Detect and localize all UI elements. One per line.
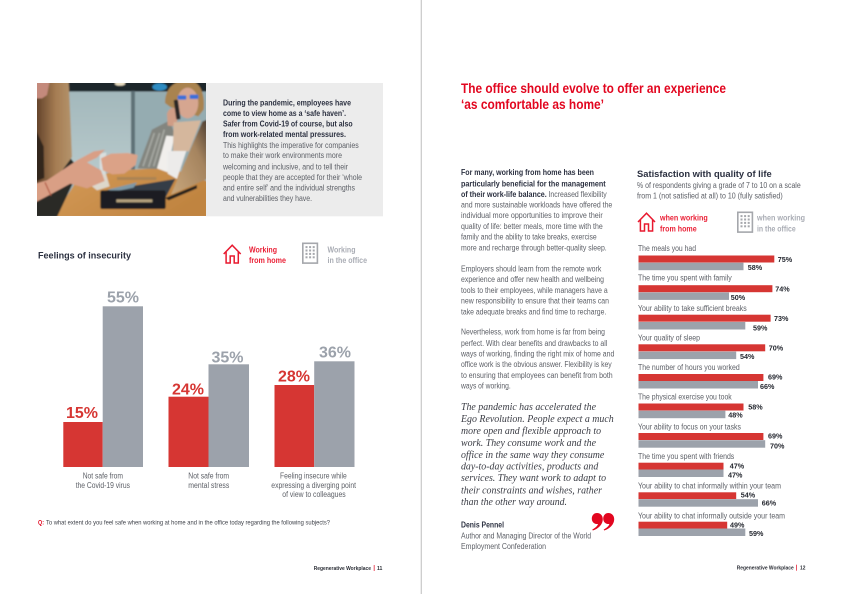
bar group: feeling insecure expressing a view xyxy=(274,344,354,467)
body text: employers: tools to their employees, while managers have a xyxy=(461,286,608,295)
row: family xyxy=(638,273,790,302)
pull quote: Ego Revolution. People expect a much xyxy=(460,413,614,425)
body text: flexibility: office work is the obvious answer. Flexibility is key xyxy=(461,360,612,369)
category label: diverging view: of view to colleagues xyxy=(282,490,346,499)
category label: covid xyxy=(76,472,130,490)
bar group: not safe from the virus xyxy=(63,290,143,467)
pull quote: more open and flexible approach to xyxy=(461,425,601,437)
body text: work-life balance: more and recharge through better-quality sleep. xyxy=(461,243,607,252)
row: chat outside team xyxy=(638,511,785,538)
row: friends: The time you spent with friends xyxy=(638,452,734,461)
legend label: working in the office: Working xyxy=(328,246,356,255)
bar chart: feelings of insecurity xyxy=(63,290,357,499)
photo: woman gesturing at a laptop xyxy=(34,80,210,220)
legend label: when working in the office: in the office xyxy=(757,224,796,234)
body text: flexibility: perfect. With clear benefits and drawbacks to all xyxy=(461,339,607,348)
category label: diverging view: Feeling insecure while xyxy=(280,472,347,480)
row: focus: 70% xyxy=(770,441,785,450)
table xyxy=(54,168,208,217)
row: sleep: 70% xyxy=(769,344,783,353)
body text: flexibility: Nevertheless, work from home is far from being xyxy=(461,328,605,336)
legend label: when working in the office xyxy=(756,214,805,234)
bar group: not safe from the virus: 55% xyxy=(107,290,139,306)
row: focus: Your ability to focus on your tasks xyxy=(638,422,741,431)
row: chat outside team: 49% xyxy=(730,520,745,529)
row: focus xyxy=(638,422,785,450)
category label: mental stress: Not safe from xyxy=(188,472,229,480)
legend: right chart xyxy=(638,212,805,234)
bar group: not safe from the virus: 15% xyxy=(66,405,98,422)
intro bold statement: from work-related mental pressures. xyxy=(223,130,346,139)
quote attribution: Denis Pennel xyxy=(461,520,504,530)
row: meals: 58% xyxy=(748,263,762,272)
pull quote: services. They want work to adapt to xyxy=(461,472,607,484)
intro bold statement: During the pandemic, employees have xyxy=(223,98,351,108)
quote attribution xyxy=(461,520,591,551)
intro bold statement: come to view home as a ‘safe haven’. xyxy=(223,109,346,118)
survey question note: To what extent do you feel safe when working at home and in the office today regarding the following subjects? xyxy=(46,521,331,527)
row: friends xyxy=(638,452,744,479)
pull quote: than the other way around. xyxy=(461,496,567,508)
row: breaks: 59% xyxy=(753,323,768,332)
bar group: not safe from mental stress: 24% xyxy=(172,382,204,398)
legend: left chart xyxy=(224,243,367,265)
right woman xyxy=(138,120,174,169)
panel: intro text xyxy=(206,83,383,216)
row: focus: 69% xyxy=(768,432,783,441)
icon: house xyxy=(224,245,241,263)
body text: flexibility xyxy=(460,328,614,390)
category label: diverging view xyxy=(271,472,357,499)
chart subtitle: from 1 (not satisfied at all) to 10 (fully satisfied) xyxy=(637,191,783,200)
body text: flexibility: to ensuring that employees can benefit from both xyxy=(461,371,613,380)
survey question note: Q: xyxy=(38,521,44,527)
row: family: The time you spent with family xyxy=(638,273,732,282)
bar group: feeling insecure expressing a view: 28% xyxy=(278,369,310,386)
heading: feelings of insecurity: Feelings of insecurity xyxy=(38,250,132,261)
pull quote: day-to-day activities, products and xyxy=(461,460,599,472)
body text: work-life balance: of their work-life balance. xyxy=(461,190,547,199)
row: family: 50% xyxy=(731,293,745,302)
row: physical exercise: 58% xyxy=(748,403,763,412)
body text: work-life balance: For many, working from home has been xyxy=(461,168,594,177)
row: chat outside team: 59% xyxy=(749,529,764,538)
intro body text xyxy=(222,141,362,203)
legend label: when working from home xyxy=(659,214,708,234)
row: breaks: Your ability to take sufficient breaks xyxy=(638,304,747,313)
row: chat within team: 66% xyxy=(762,498,776,507)
row: friends: 47% xyxy=(728,470,743,479)
body text: flexibility: ways of working. xyxy=(460,382,511,390)
footer: page 12: 12 xyxy=(800,566,805,572)
row: meals xyxy=(638,244,792,272)
row: chat within team: 54% xyxy=(741,490,755,499)
row: meals: 75% xyxy=(778,255,792,264)
legend label: working in the office xyxy=(328,246,367,265)
chart subtitle: % of respondents giving a grade of 7 to 10 on a scale xyxy=(637,181,801,190)
laptop xyxy=(100,179,175,198)
legend label: working from home xyxy=(249,246,286,265)
row: sleep xyxy=(638,333,783,361)
icon: closing quotation mark xyxy=(592,513,614,530)
row: sleep: 54% xyxy=(740,352,755,361)
pull quote: The pandemic has accelerated the xyxy=(461,401,596,413)
row: family: 74% xyxy=(775,285,790,294)
body text: work-life balance: particularly beneficial for the management xyxy=(461,179,606,188)
row: chat within team xyxy=(638,482,781,507)
body text: work-life balance xyxy=(461,168,613,252)
intro bold statement xyxy=(223,98,353,139)
row: hours worked xyxy=(638,363,783,391)
legend label: when working from home: when working xyxy=(659,214,708,222)
quote attribution: Author and Managing Director of the World xyxy=(461,532,591,540)
heading: satisfaction with quality of life: Satisfaction with quality of life xyxy=(637,169,772,180)
body text: employers xyxy=(461,264,609,316)
body text: work-life balance: family and the ability to take breaks, exercise xyxy=(461,232,597,241)
body text: employers: experience and offer new health and wellbeing xyxy=(461,275,604,284)
legend label: working in the office: in the office xyxy=(328,256,367,265)
category label: covid: Not safe from xyxy=(83,472,123,480)
title: right page: The office should evolve to offer an experience xyxy=(461,81,726,96)
body text: work-life balance: quality of life: better meals, more time with the xyxy=(461,222,603,231)
body text: employers: new responsibility to ensure that their teams can xyxy=(461,296,609,305)
pull quote: office in the same way they consume xyxy=(461,449,604,461)
quote attribution: Employment Confederation xyxy=(461,542,546,551)
row: chat within team: Your ability to chat informally within your team xyxy=(638,482,781,491)
body text: work-life balance: and more sustainable workloads have offered the xyxy=(461,200,613,209)
row: chat outside team: Your ability to chat informally outside your team xyxy=(638,511,785,520)
icon: house xyxy=(638,213,655,231)
row: sleep: Your quality of sleep xyxy=(638,333,701,342)
row: hours worked: The number of hours you worked xyxy=(638,363,740,372)
row: friends: 47% xyxy=(730,461,744,470)
row: hours worked: 66% xyxy=(760,382,775,391)
pull quote: work. They consume work and the xyxy=(461,437,596,449)
footer: page 11: Regenerative Workplace xyxy=(314,566,371,572)
bar group: not safe from mental stress xyxy=(168,350,249,467)
pull quote: their constraints and wishes, rather xyxy=(461,484,603,496)
bar group: not safe from mental stress: 35% xyxy=(212,350,244,366)
legend label: when working in the office: when working xyxy=(756,214,805,222)
intro body text: welcoming and inclusive, and to tell their xyxy=(222,162,348,172)
chart subtitle xyxy=(637,181,801,200)
row: physical exercise xyxy=(638,392,763,420)
left woman: dark top and hair xyxy=(35,158,74,217)
row: hours worked: 69% xyxy=(768,373,783,382)
body text: work-life balance: individual more opportunities to improve their xyxy=(461,211,603,220)
footer: page 12: Regenerative Workplace xyxy=(737,566,794,572)
body text: employers: take adequate breaks and find time to recharge. xyxy=(461,307,606,316)
bar chart: satisfaction with quality of life xyxy=(638,244,792,538)
title: right page xyxy=(461,81,726,112)
icon: office building xyxy=(303,243,317,263)
pull quote xyxy=(460,401,614,508)
legend label: when working from home: from home xyxy=(660,224,697,234)
title: right page: ‘as comfortable as home’ xyxy=(461,97,604,112)
bar group: feeling insecure expressing a view: 36% xyxy=(319,344,351,362)
row: meals: The meals you had xyxy=(638,244,696,253)
category label: covid: the Covid-19 virus xyxy=(76,481,130,490)
bottle and hands xyxy=(90,152,110,190)
row: breaks xyxy=(638,304,789,332)
row: physical exercise: 48% xyxy=(728,411,743,420)
legend label: working from home: Working xyxy=(249,246,277,255)
category label: mental stress xyxy=(188,472,229,490)
intro body text: and vulnerabilities they have. xyxy=(223,194,312,203)
footer: page 11: 11 xyxy=(377,566,382,572)
body text: flexibility: ways of working, finding the right mix of home and xyxy=(460,350,614,358)
category label: mental stress: mental stress xyxy=(188,481,229,490)
intro body text: people that they are accepted for their ‘whole xyxy=(223,173,362,182)
body text: work-life balance: Increased flexibility xyxy=(548,190,607,199)
intro body text: This highlights the imperative for companies xyxy=(223,141,359,150)
intro bold statement: Safer from Covid-19 of course, but also xyxy=(223,120,353,128)
row: breaks: 73% xyxy=(774,314,789,323)
category label: diverging view: expressing a diverging point xyxy=(271,481,357,490)
body text: employers: Employers should learn from the remote work xyxy=(461,264,602,273)
intro body text: and entire self’ and the individual strengths xyxy=(223,184,355,192)
intro body text: to make their work environments more xyxy=(223,151,342,160)
icon: office building xyxy=(738,212,752,232)
row: physical exercise: The physical exercise you took xyxy=(638,392,732,401)
legend label: working from home: from home xyxy=(249,256,286,265)
